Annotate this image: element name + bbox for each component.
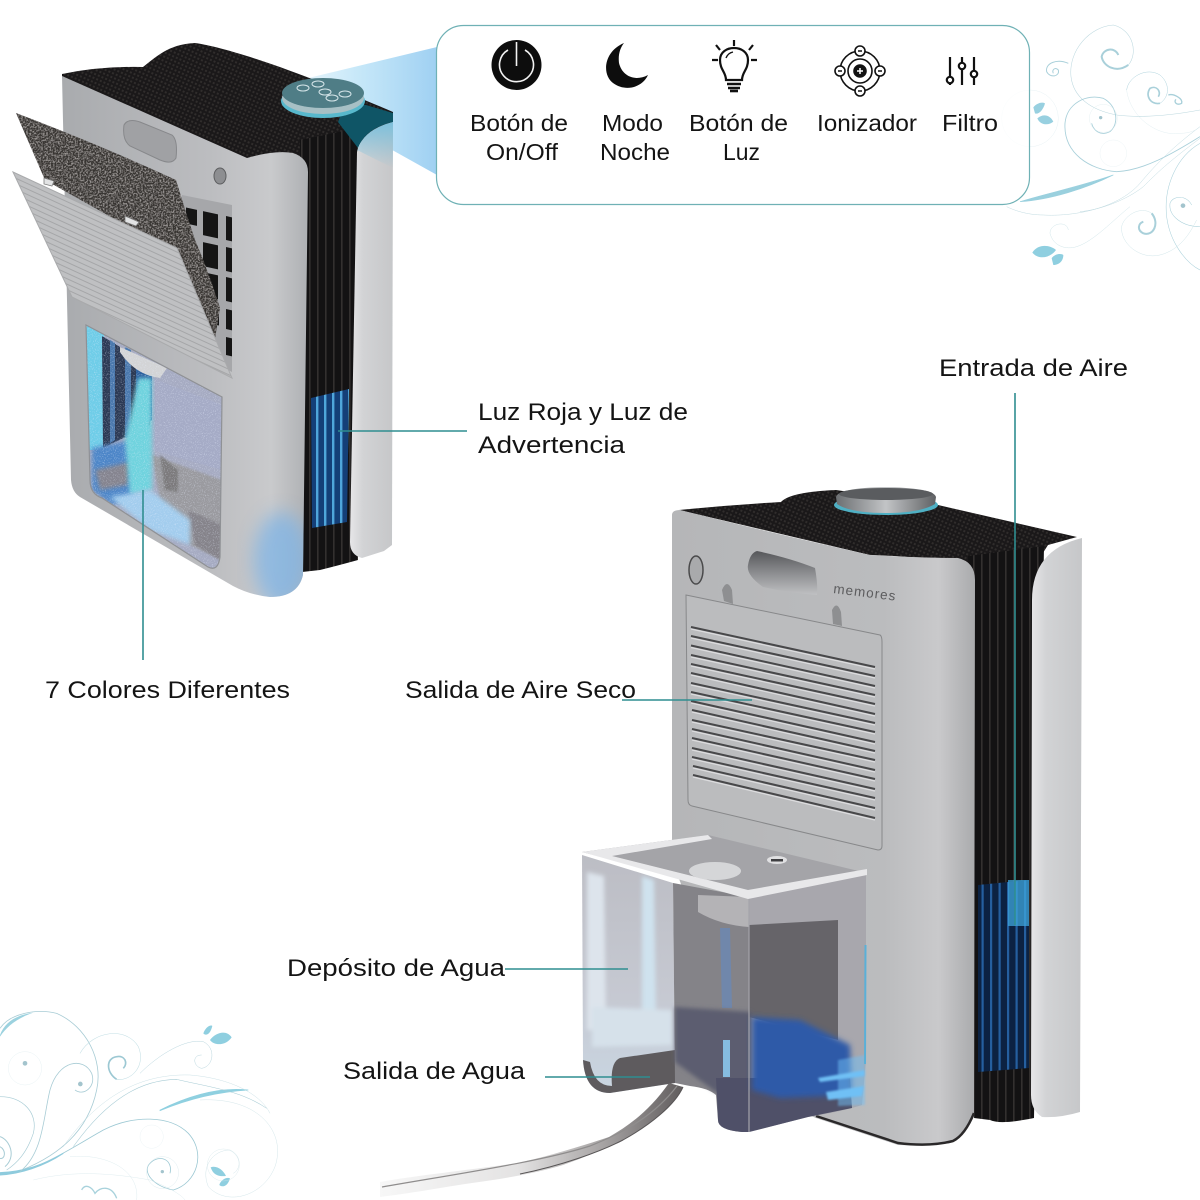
window border [86, 325, 222, 568]
product: dehumidifier with open filter [13, 43, 393, 608]
carbon filter foam [16, 113, 220, 345]
light cone from dial to icon panel [300, 47, 437, 175]
label: Botón de On/Off: Botón de [470, 110, 568, 136]
lid slot [767, 856, 787, 864]
handle recess [124, 121, 176, 162]
transparent water window [86, 326, 222, 568]
floor block [675, 1007, 752, 1098]
label: Luz Roja y Luz de Advertencia: Advertencia [478, 432, 626, 459]
blue glow on panel bottom [254, 512, 310, 608]
handle recess [748, 551, 817, 595]
cover clips [722, 584, 842, 626]
louvers [691, 627, 875, 818]
icon: light bulb [712, 40, 757, 91]
rear panel [672, 510, 975, 1145]
side panel [350, 122, 393, 558]
label: Depósito de Agua: Depósito de Agua [287, 955, 506, 982]
bottom shadow [816, 1113, 974, 1145]
tank mid face [673, 883, 749, 1132]
callout leader lines [143, 393, 1015, 1077]
left bottom dark band [583, 1050, 675, 1093]
top black mesh [62, 43, 393, 172]
inner dark block [749, 920, 838, 1040]
low dark floor [716, 1078, 852, 1132]
screw hole [214, 168, 226, 184]
tank lid [582, 835, 867, 895]
label: Entrada de Aire: Entrada de Aire [939, 355, 1128, 382]
water tank [582, 835, 867, 1132]
label: Modo Noche [600, 110, 670, 165]
lid rim [582, 835, 867, 899]
label: Botón de On/Off [470, 110, 568, 165]
label: Filtro: Filtro [942, 110, 998, 136]
label: Salida de Aire Seco: Salida de Aire Seco [405, 677, 636, 704]
tank right face [749, 873, 866, 1132]
open cover flap [13, 172, 232, 378]
round hole [689, 556, 703, 584]
louver highlights [691, 629, 875, 820]
label: Luz Roja y Luz de Advertencia: Luz Roja y Luz de [478, 399, 688, 426]
icon: moon [606, 43, 648, 88]
drain tube [380, 1083, 683, 1197]
label: Botón de Luz: Botón de [689, 110, 788, 136]
vertical black ribs [300, 128, 358, 572]
teal tinted corner [338, 104, 393, 148]
side panel blue tint [357, 122, 393, 168]
top black mesh [679, 490, 1077, 573]
small cyan bar [723, 1040, 730, 1077]
blue floor [752, 1017, 852, 1098]
blue lit ribs [978, 880, 1029, 1072]
label: Luz Roja y Luz de Advertencia [478, 399, 688, 459]
label: Salida de Agua: Salida de Agua [343, 1058, 526, 1085]
icon: power button [492, 40, 542, 90]
label: Modo Noche: Modo [602, 110, 663, 136]
flap clips [44, 178, 139, 226]
icon: ionizer [835, 46, 885, 96]
lid hole [689, 862, 741, 880]
label: Botón de Luz: Luz [723, 139, 760, 165]
side panel [1031, 538, 1082, 1117]
label: Botón de On/Off: On/Off [486, 139, 559, 165]
label: Modo Noche: Noche [600, 139, 670, 165]
left reflections [587, 872, 672, 1047]
label: 7 Colores Diferentes: 7 Colores Diferentes [45, 677, 290, 704]
front edge [748, 895, 750, 1132]
product: dehumidifier rear with water tank [380, 487, 1082, 1197]
vertical black ribs [968, 546, 1044, 1122]
inner light block [698, 895, 749, 927]
label: Botón de Luz [689, 110, 788, 165]
icon: filter sliders [947, 57, 977, 85]
vent panel [686, 595, 882, 850]
blue lit rib section [311, 389, 349, 528]
cyan highlight [1008, 880, 1029, 926]
front panel [62, 76, 308, 597]
tank left face [582, 855, 675, 1093]
decorative swirl: bottom left [0, 1011, 278, 1200]
filter grid [182, 195, 232, 372]
icon panel [436, 26, 1030, 204]
label: Ionizador: Ionizador [817, 110, 917, 136]
slot shadow [771, 859, 783, 862]
blue glow streaks [818, 1055, 865, 1106]
control dial [281, 78, 365, 118]
dial silver [834, 487, 938, 515]
brand: memores [833, 581, 897, 604]
blue strip [720, 928, 732, 1008]
decorative swirl: top right [1002, 25, 1200, 270]
right edge cyan line [864, 945, 866, 1064]
